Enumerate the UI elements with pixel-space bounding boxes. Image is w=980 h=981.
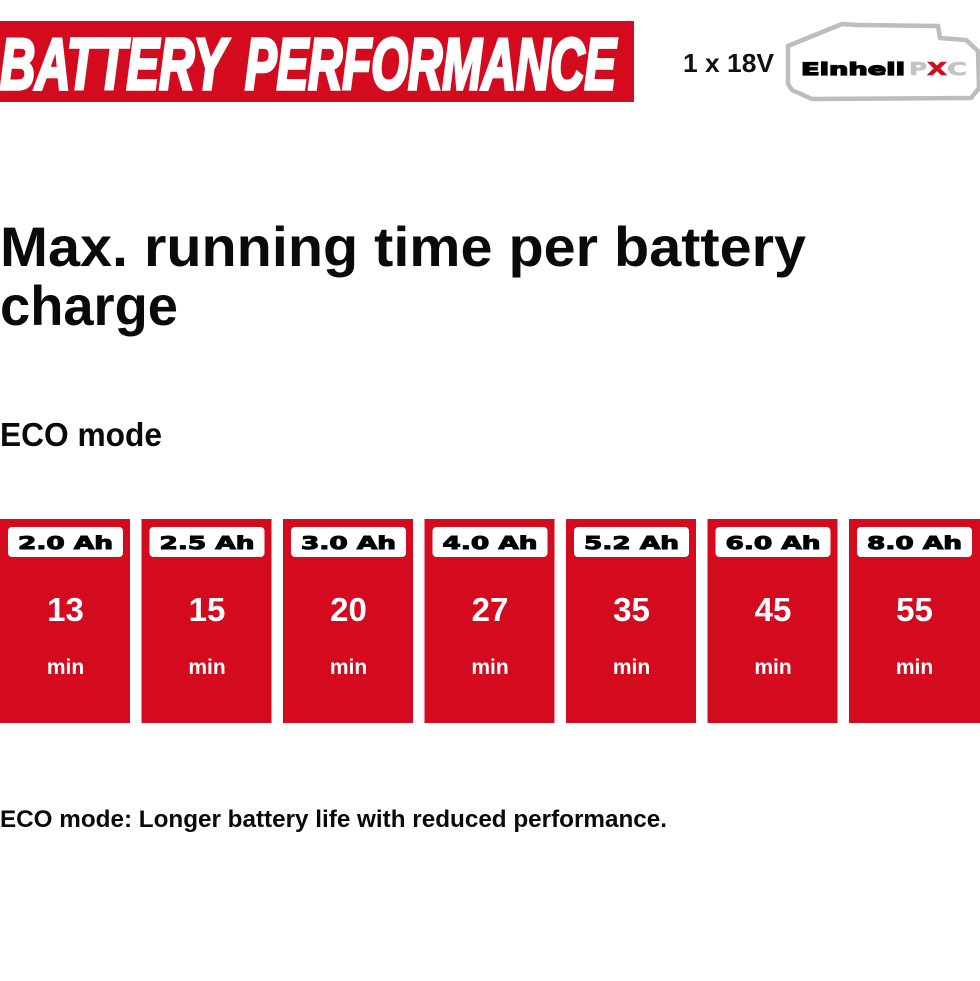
card: 3.0 Ah: min: [330, 656, 367, 679]
card: 4.0 Ah: 4.0 Ah: [442, 533, 538, 554]
icon: Einhell PXC battery logo: Einhell: [801, 60, 905, 80]
card: 2.0 Ah: [0, 519, 130, 723]
card: 6.0 Ah: 6.0 Ah: [726, 533, 820, 554]
card: 2.0 Ah: 13: [47, 591, 84, 628]
card: 8.0 Ah: 55: [896, 591, 933, 628]
card: 6.0 Ah: min: [754, 656, 792, 679]
card: 2.5 Ah: 2.5 Ah: [160, 533, 254, 554]
card: 4.0 Ah: [424, 519, 554, 723]
subheading: ECO mode: ECO mode: [0, 416, 162, 453]
icon: Einhell PXC battery logo: [788, 24, 979, 99]
title banner: battery performance: BATTERY: [0, 25, 230, 105]
title banner: battery performance: PERFORMANCE: [245, 25, 617, 105]
card: 6.0 Ah: [708, 519, 838, 723]
battery count label: 1 x 18V: [683, 48, 775, 78]
footnote: ECO mode explanation: ECO mode: Longer battery life with reduced performance.: [0, 806, 667, 833]
main heading: charge: [0, 274, 178, 337]
card: 5.2 Ah: 5.2 Ah: [584, 533, 679, 554]
card: 2.5 Ah: min: [188, 656, 226, 679]
card: 3.0 Ah: 20: [330, 591, 367, 628]
card: 4.0 Ah: min: [471, 656, 509, 679]
card: 2.0 Ah: 2.0 Ah: [18, 533, 113, 554]
main heading: Max. running time per battery: [0, 215, 806, 278]
runtime cards: [0, 519, 980, 723]
card: 2.0 Ah: min: [47, 656, 84, 679]
card: 2.5 Ah: 15: [189, 591, 225, 628]
icon: Einhell PXC battery logo: P: [909, 59, 927, 80]
card: 4.0 Ah: 27: [472, 591, 508, 628]
card: 2.5 Ah: [142, 519, 272, 723]
title banner: battery performance: [0, 21, 634, 105]
icon: Einhell PXC battery logo: C: [947, 59, 967, 80]
icon: Einhell PXC battery logo: X: [927, 59, 947, 80]
card: 5.2 Ah: [566, 519, 696, 723]
card: 6.0 Ah: 45: [755, 591, 791, 628]
card: 8.0 Ah: 8.0 Ah: [867, 533, 962, 554]
card: 8.0 Ah: [849, 519, 980, 723]
card: 3.0 Ah: 3.0 Ah: [301, 533, 396, 554]
card: 5.2 Ah: 35: [613, 591, 650, 628]
card: 5.2 Ah: min: [613, 656, 650, 679]
card: 8.0 Ah: min: [896, 656, 933, 679]
main heading: [0, 215, 806, 337]
card: 3.0 Ah: [283, 519, 413, 723]
